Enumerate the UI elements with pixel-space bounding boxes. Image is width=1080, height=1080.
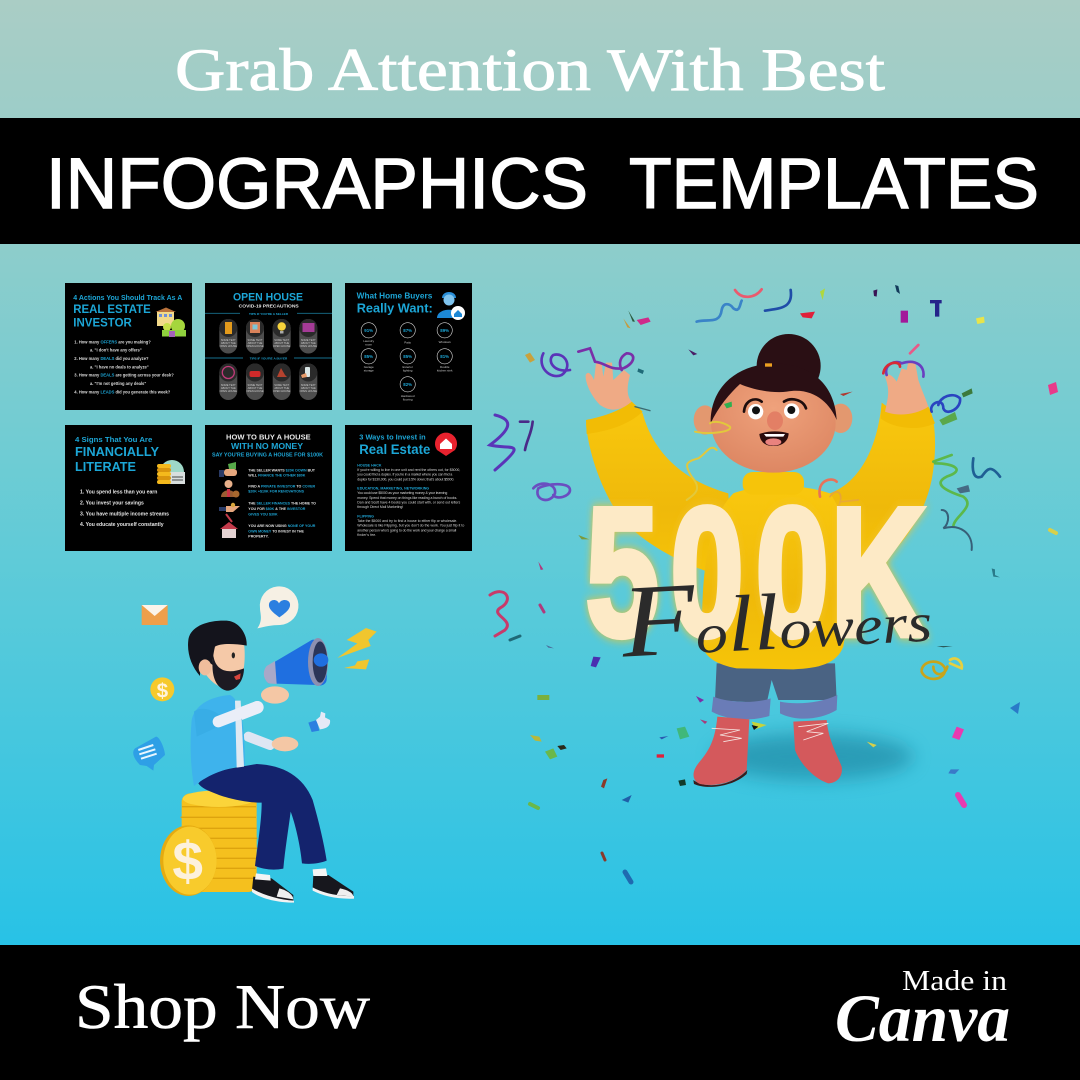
panel: 3 ways to invest: You could use $5000 as your marketing money & your learning bbox=[357, 491, 447, 495]
tip pills: SOME TEXT bbox=[248, 383, 263, 387]
tip pills: ABOUT THE bbox=[221, 386, 236, 390]
panel: what home buyers want: 89% bbox=[440, 328, 449, 333]
bottom band bbox=[0, 945, 1080, 1080]
sweater body bbox=[702, 486, 849, 669]
panel: 3 ways to invest: Dan and Scott have 4 books you could start with, or send out letters bbox=[357, 500, 461, 504]
panel: what home buyers want: Laundry bbox=[363, 339, 375, 343]
tip pills bbox=[219, 319, 317, 400]
panel: what home buyers want: Exterior bbox=[403, 365, 413, 369]
panel: buy a house with no money: WITH NO MONEY bbox=[231, 442, 304, 451]
tip pills: SOME TEXT bbox=[248, 338, 263, 342]
panel: 3 ways to invest: Take the $5000 and try to find a house to either flip or wholesale. bbox=[357, 519, 457, 523]
sleeve cuffs bbox=[586, 402, 935, 434]
icon: dollar coin bbox=[150, 677, 174, 702]
panel: buy a house with no money: YOU ARE NOW USING NONE OF YOUR bbox=[248, 524, 315, 528]
boots bbox=[693, 717, 842, 787]
panel: buy a house with no money: YOU FOR $80K & THE INVESTOR bbox=[248, 507, 305, 511]
tip pills: ABOUT THE bbox=[221, 341, 236, 345]
ears bbox=[694, 404, 852, 435]
tip pills: SOME TEXT bbox=[221, 383, 236, 387]
megaphone bbox=[264, 638, 328, 686]
panel: buy a house with no money: GIVES YOU $30K bbox=[248, 512, 278, 516]
tip pills: OPEN HOUSE bbox=[273, 344, 291, 348]
hair bun bbox=[757, 334, 821, 398]
tip pills: OPEN HOUSE bbox=[220, 389, 237, 393]
panel: real estate investor: a. "I don't have any offers" bbox=[90, 348, 142, 353]
panel: open house: OPEN HOUSE bbox=[233, 292, 303, 304]
panel: 3 ways to invest bbox=[345, 425, 472, 551]
panel: buy a house with no money: $20K +$10K FOR RENOVATIONS bbox=[248, 490, 305, 494]
arms bbox=[220, 707, 270, 745]
panel: what home buyers want: 85% bbox=[403, 354, 412, 359]
panel: 3 ways to invest: Wholesale is like Flipping, but you don't do the work. You just flip it to bbox=[357, 524, 464, 528]
panel: what home buyers want: 87% bbox=[403, 328, 412, 333]
tip pills: OPEN HOUSE bbox=[300, 389, 317, 393]
shirt placket bbox=[235, 701, 244, 768]
panel: open house bbox=[205, 283, 332, 410]
panel: real estate investor: 4. How many LEADS did you generate this week? bbox=[74, 389, 171, 394]
panel: 3 ways to invest: EDUCATION, MARKETING, NETWORKING bbox=[357, 487, 429, 491]
shoes bbox=[252, 868, 354, 903]
number glow: 500K bbox=[586, 471, 925, 674]
hands bbox=[586, 362, 928, 414]
panel: what home buyers want: 85% bbox=[364, 354, 373, 359]
icon: location pin bbox=[435, 433, 457, 456]
panel: what home buyers want: Really Want: bbox=[357, 300, 433, 316]
ribbons and confetti bbox=[520, 285, 1000, 803]
illustration: celebrating character with 500K bbox=[520, 285, 1000, 803]
title band bbox=[0, 118, 1080, 244]
tip pills: ABOUT THE bbox=[274, 386, 289, 390]
panel: what home buyers want: Double bbox=[440, 365, 450, 369]
shorts bbox=[712, 663, 837, 719]
tip pills: SOME TEXT bbox=[301, 338, 316, 342]
panel: real estate investor bbox=[65, 283, 192, 410]
panel: buy a house with no money: HOW TO BUY A HOUSE bbox=[226, 432, 311, 441]
large dollar coin: $ bbox=[172, 830, 203, 892]
tip pills: OPEN HOUSE bbox=[246, 344, 264, 348]
panel: what home buyers want: room bbox=[365, 342, 373, 346]
panel: buy a house with no money: SAY YOU'RE BUYING A HOUSE FOR $100K bbox=[212, 453, 323, 459]
icon: dollar coin: $ bbox=[157, 679, 169, 702]
tip pills: SOME TEXT bbox=[301, 383, 316, 387]
tip pills: SOME TEXT bbox=[221, 338, 236, 342]
floor shadow bbox=[713, 733, 913, 780]
panel: financially literate: 3. You have multiple income streams bbox=[80, 511, 169, 517]
panel: what home buyers want: 81% bbox=[440, 354, 449, 359]
panel: financially literate: 4 Signs That You Are bbox=[75, 435, 152, 444]
tip pills: OPEN HOUSE bbox=[300, 344, 317, 348]
panel: real estate investor: INVESTOR bbox=[73, 318, 132, 330]
panel: buy a house with no money: THE SELLER WANTS $20K DOWN BUT bbox=[248, 468, 315, 472]
edge confetti bbox=[490, 382, 1058, 882]
boot laces bbox=[712, 723, 828, 742]
panel: 3 ways to invest: HOUSE HACK bbox=[357, 464, 382, 468]
panel: 3 ways to invest: duplex for $130,000, you could put 3.5% down; that's about $5000. bbox=[357, 477, 454, 481]
panel: buy a house with no money: THE SELLER FINANCES THE HOME TO bbox=[248, 502, 316, 506]
panel: real estate investor: 1. How many OFFERS are you making? bbox=[74, 339, 151, 344]
tip pills: ABOUT THE bbox=[301, 341, 316, 345]
panel: real estate investor: 4 Actions You Should Track As A bbox=[73, 293, 182, 302]
panel: buy a house with no money bbox=[205, 425, 332, 551]
icon: chat bubble bbox=[133, 737, 165, 771]
title: infographics templates: INFOGRAPHICS bbox=[46, 145, 588, 224]
panel: real estate investor: a. "I'm not getting any deals" bbox=[90, 381, 146, 386]
panel: real estate investor: 2. How many DEALS did you analyze? bbox=[74, 356, 149, 361]
top headline: Grab Attention With Best bbox=[175, 37, 885, 103]
panel: what home buyers want: kitchen sink bbox=[437, 368, 453, 372]
panel: 3 ways to invest: through Direct Mail Marketing! bbox=[357, 505, 403, 509]
panel: what home buyers want: storage bbox=[364, 368, 374, 372]
panel: open house: TIPS IF YOU'RE A BUYER bbox=[250, 357, 288, 361]
hands bbox=[261, 686, 298, 751]
panel: what home buyers want: flooring bbox=[403, 397, 413, 401]
panel: 3 ways to invest: FLIPPING bbox=[357, 514, 374, 518]
panel: what home buyers want: Windows bbox=[439, 340, 451, 344]
made in canva: Canva bbox=[835, 980, 1010, 1056]
panel: what home buyers want: lighting bbox=[403, 368, 413, 372]
icon: house bbox=[156, 308, 186, 337]
shirt sleeve bbox=[194, 709, 220, 737]
panel: buy a house with no money: FIND A PRIVATE INVESTOR TO COVER bbox=[248, 484, 315, 488]
tip pills: ABOUT THE bbox=[301, 386, 316, 390]
head bbox=[188, 621, 247, 691]
tip pills: ABOUT THE bbox=[274, 341, 289, 345]
panel: open house: TIPS IF YOU'RE A SELLER bbox=[249, 312, 289, 316]
tip pills: OPEN HOUSE bbox=[220, 344, 237, 348]
icon: coins bbox=[157, 460, 185, 484]
tip pills: ABOUT THE bbox=[248, 386, 263, 390]
eyes, nose and mouth bbox=[744, 399, 806, 446]
panel: what home buyers want: Patio bbox=[404, 340, 411, 344]
panel: what home buyers want: What Home Buyers bbox=[357, 292, 433, 300]
panel: 3 ways to invest: If you're willing to live in one unit and rent the others out, for $5000, bbox=[357, 468, 460, 472]
panel: what home buyers want: Hardwood bbox=[401, 394, 415, 398]
panel: 3 ways to invest: 3 Ways to Invest in bbox=[359, 433, 426, 442]
panel: financially literate: 2. You invest your savings bbox=[80, 500, 144, 506]
panel: financially literate bbox=[65, 425, 192, 551]
panel: buy a house with no money: OWN MONEY TO INVEST IN THE bbox=[248, 529, 304, 533]
panel: financially literate: 1. You spend less than you earn bbox=[80, 489, 157, 495]
icon: thumbs up bbox=[308, 712, 330, 732]
panel: real estate investor: a. "I have no deals to analyze" bbox=[90, 364, 149, 369]
panel: buy a house with no money: WILL FINANCE THE OTHER $80K bbox=[248, 474, 305, 478]
icon: lightning bbox=[337, 628, 377, 669]
tip pills: SOME TEXT bbox=[274, 383, 290, 387]
shirt bbox=[191, 695, 245, 786]
number: 500K: 500K bbox=[586, 471, 925, 674]
tip pills: OPEN HOUSE bbox=[273, 389, 291, 393]
script: Followers: Followers bbox=[617, 550, 934, 680]
panel: 3 ways to invest: money. Spend that money on things like reading a bunch of books. bbox=[357, 496, 457, 500]
trousers bbox=[198, 764, 327, 870]
call to action: shop now: Shop Now bbox=[75, 971, 370, 1042]
left sleeve bbox=[586, 402, 733, 580]
panel: real estate investor: REAL ESTATE bbox=[73, 304, 151, 316]
icon: heart bubble bbox=[257, 586, 298, 628]
panel: 3 ways to invest: another person who's going to do the work and your charge a small bbox=[357, 528, 457, 532]
icons: steps bbox=[219, 462, 240, 538]
panel: what home buyers want: 82% bbox=[403, 382, 412, 387]
panel: what home buyers want: Garage bbox=[364, 365, 374, 369]
panel: financially literate: LITERATE bbox=[75, 460, 136, 474]
panel: what home buyers want bbox=[345, 283, 472, 410]
face bbox=[711, 374, 836, 473]
panel: real estate investor: 3. How many DEALS are getting across your desk? bbox=[74, 373, 174, 378]
made in canva: Made in bbox=[902, 965, 1008, 997]
right sleeve bbox=[830, 403, 935, 577]
panel: financially literate: 4. You educate yourself constantly bbox=[80, 522, 164, 528]
panel: 3 ways to invest: you could find a duplex. If you're in a market where you can find a bbox=[357, 473, 452, 477]
panel: 3 ways to invest: finder's fee. bbox=[357, 533, 376, 537]
hair bbox=[711, 363, 837, 423]
icon: buyer bbox=[437, 292, 465, 320]
panel: 3 ways to invest: Real Estate bbox=[359, 442, 430, 457]
tip pills: OPEN HOUSE bbox=[246, 389, 264, 393]
tip pills: ABOUT THE bbox=[248, 341, 263, 345]
panel: buy a house with no money: PROPERTY. bbox=[248, 535, 269, 539]
illustration: man with megaphone on coins bbox=[133, 586, 377, 903]
coin stack bbox=[181, 790, 257, 892]
collar bbox=[743, 472, 804, 495]
panel: financially literate: FINANCIALLY bbox=[75, 445, 160, 459]
panel: what home buyers want: 91% bbox=[364, 328, 373, 333]
tip pills: SOME TEXT bbox=[274, 338, 290, 342]
title: infographics templates: TEMPLATES bbox=[629, 145, 1039, 224]
large dollar coin bbox=[160, 825, 217, 896]
sweater bbox=[586, 402, 935, 669]
icon: envelope bbox=[142, 605, 168, 625]
sleeve front bbox=[218, 707, 257, 722]
panel: open house: COVID-19 PRECAUTIONS bbox=[239, 304, 299, 308]
